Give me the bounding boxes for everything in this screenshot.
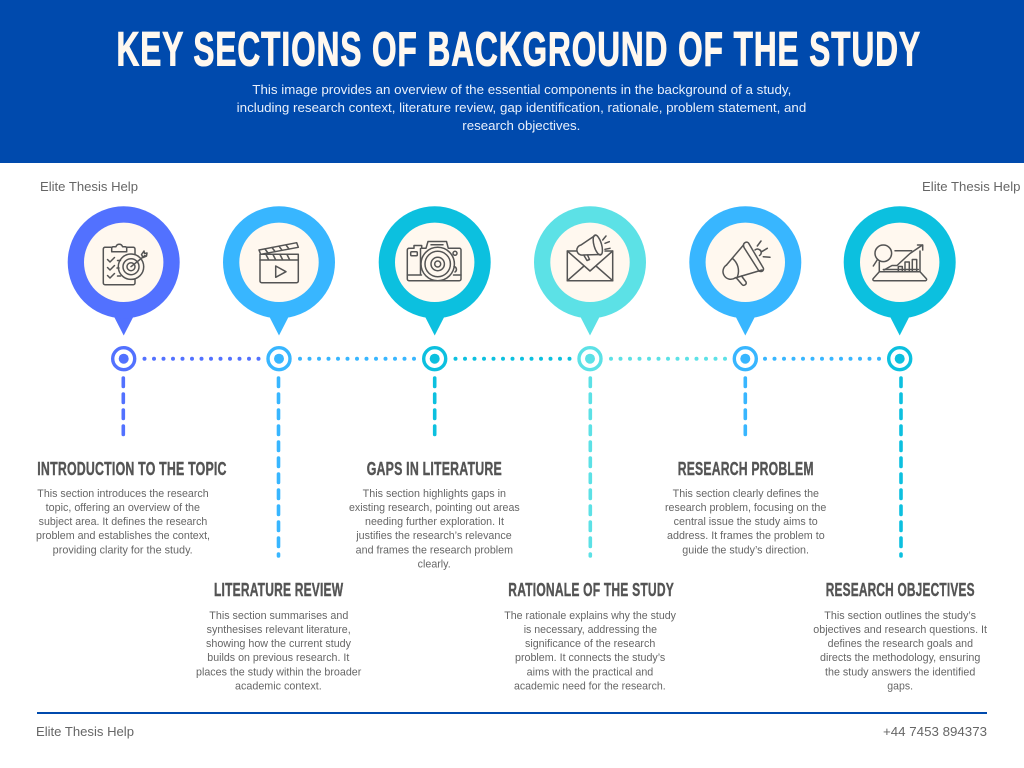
stem 1 — [122, 378, 125, 436]
body: literature review: places the study within the broader — [196, 666, 362, 678]
icon: clapperboard — [259, 243, 298, 283]
body: research problem: address. It frames the problem to — [667, 530, 825, 542]
subtitle: research objectives. — [462, 118, 580, 133]
stem 2 — [277, 378, 280, 556]
text block: research objectives — [813, 579, 987, 692]
body: rationale of the study — [504, 610, 677, 692]
stem 6 — [899, 378, 903, 556]
body: gaps in literature — [349, 488, 520, 570]
body: literature review: synthesises relevant literature, — [207, 624, 351, 636]
body: rationale of the study: is necessary, addressing the — [524, 624, 657, 636]
heading: rationale of the study: RATIONALE OF THE STUDY — [508, 579, 674, 600]
body: research problem: central issue the study aims to — [674, 516, 818, 528]
timeline node 5 — [734, 348, 756, 370]
pin 3 — [379, 206, 491, 336]
subtitle — [237, 82, 806, 133]
footer brand: Elite Thesis Help — [36, 724, 134, 739]
footer phone: +44 7453 894373 — [883, 724, 987, 739]
heading: literature review: LITERATURE REVIEW — [214, 579, 343, 600]
body: research problem — [665, 488, 826, 556]
body: literature review — [196, 610, 362, 692]
body: introduction: problem and establishes the context, — [36, 530, 210, 542]
heading: research problem: RESEARCH PROBLEM — [678, 458, 814, 479]
text block: gaps in literature — [349, 458, 520, 570]
pin 1 — [68, 206, 180, 336]
timeline node 2 — [268, 348, 290, 370]
body: introduction: topic, offering an overview of the — [46, 502, 200, 514]
body: research problem: guide the study’s direction. — [682, 544, 809, 556]
stem 3 — [433, 378, 437, 436]
icon: laptop chart with magnifier — [873, 245, 927, 281]
body: research objectives: objectives and research questions. It — [813, 624, 987, 636]
body: rationale of the study: problem. It connects the study’s — [515, 652, 665, 664]
body: introduction: subject area. It defines the research — [39, 516, 207, 528]
subtitle: This image provides an overview of the essential components in the background of a study, — [252, 82, 791, 97]
body: research objectives: gaps. — [887, 680, 913, 692]
body: research objectives: This section outlines the study’s — [824, 610, 976, 622]
header banner — [0, 0, 1024, 163]
timeline dotted connectors — [144, 357, 879, 361]
body: gaps in literature: clearly. — [418, 558, 451, 570]
body: literature review: builds on previous research. It — [207, 652, 349, 664]
body: literature review: academic context. — [235, 680, 322, 692]
body: research objectives: the study answers the identified — [825, 666, 975, 678]
body: gaps in literature: existing research, pointing out areas — [349, 502, 520, 514]
body: literature review: showing how the current study — [206, 638, 352, 650]
body: research problem: research problem, focusing on the — [665, 502, 826, 514]
body: introduction — [36, 488, 210, 556]
stem 5 — [743, 378, 747, 436]
body: literature review: This section summarises and — [209, 610, 348, 622]
body: rationale of the study: aims with the practical and — [527, 666, 653, 678]
pin 5 — [689, 206, 801, 336]
brand label right: Elite Thesis Help — [922, 179, 1020, 194]
subtitle: including research context, literature review, gap identification, rationale, problem statement, and — [237, 100, 806, 115]
icon: envelope with megaphone — [567, 234, 613, 281]
body: research objectives: defines the research goals and — [828, 638, 973, 650]
body: gaps in literature: This section highlights gaps in — [363, 488, 506, 500]
body: research objectives: directs the methodology, ensuring — [820, 652, 980, 664]
icon: megaphone — [723, 241, 770, 285]
text block: rationale of the study — [504, 579, 677, 692]
footer — [36, 712, 987, 739]
body: rationale of the study: significance of the research — [525, 638, 655, 650]
pin 2 — [223, 206, 335, 336]
brand label left: Elite Thesis Help — [40, 179, 138, 194]
body: gaps in literature: and frames the research problem — [356, 544, 513, 556]
body: research problem: This section clearly defines the — [673, 488, 819, 500]
pin 6 — [844, 206, 956, 336]
text block: research problem — [665, 458, 826, 556]
body: gaps in literature: needing further exploration. It — [365, 516, 504, 528]
icon: camera — [407, 242, 461, 281]
body: rationale of the study: academic need for the research. — [514, 680, 666, 692]
body: gaps in literature: justifies the research’s relevance — [355, 530, 512, 542]
timeline node 6 — [889, 348, 911, 370]
body: research objectives — [813, 610, 987, 692]
stem 4 — [588, 378, 592, 556]
heading: introduction: INTRODUCTION TO THE TOPIC — [37, 458, 227, 479]
body: rationale of the study: The rationale explains why the study — [504, 610, 677, 622]
timeline node 4 — [579, 348, 601, 370]
heading: gaps in literature: GAPS IN LITERATURE — [367, 458, 502, 479]
body: introduction: This section introduces the research — [37, 488, 209, 500]
timeline node 3 — [424, 348, 446, 370]
text block: introduction — [36, 458, 227, 556]
body: introduction: providing clarity for the study. — [53, 544, 193, 556]
pin 4 — [534, 206, 646, 336]
timeline node 1 — [113, 348, 135, 370]
icon: clipboard with target — [103, 244, 147, 285]
text block: literature review — [196, 579, 362, 692]
